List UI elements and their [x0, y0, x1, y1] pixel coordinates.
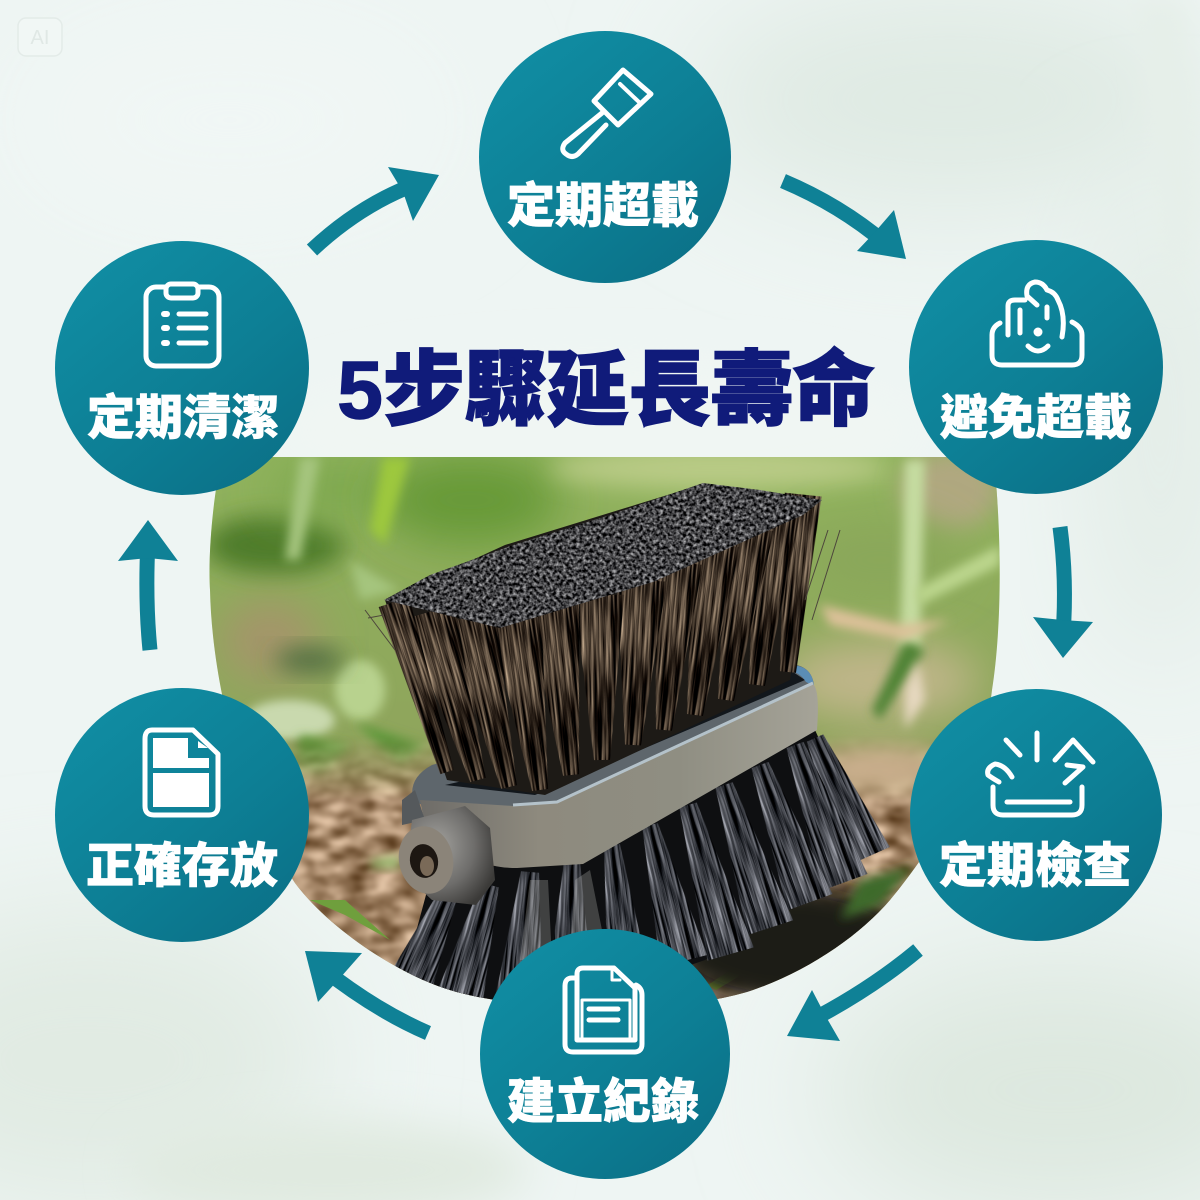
title: 5步驟延長壽命 [337, 345, 875, 436]
arrow: left column upwards [118, 520, 178, 650]
arrow: clean to check step [312, 167, 439, 250]
label: 定期檢查 [939, 839, 1131, 893]
step: 正確存放 [55, 688, 309, 942]
circle [910, 689, 1162, 941]
shadow under brush [692, 878, 894, 999]
circle [55, 688, 309, 942]
arrow: bottom to lower left [305, 951, 428, 1033]
brush top surface [384, 483, 822, 628]
icon: document storage [145, 730, 218, 815]
watermark: AI badge [18, 18, 62, 56]
icon: brush [563, 70, 651, 156]
circle [480, 929, 730, 1179]
label: 正確存放 [86, 840, 278, 893]
step: 避免超載 [909, 240, 1163, 494]
circle [479, 31, 731, 283]
brush metal holder front [393, 683, 818, 905]
icon: inspection tray [988, 733, 1093, 815]
step: 定期清潔 [55, 241, 309, 495]
icon: clipboard [146, 284, 219, 366]
circle [909, 240, 1163, 494]
label: 避免超載 [940, 392, 1132, 445]
label: 定期超載 [507, 180, 699, 233]
icon: overloaded tray [992, 282, 1082, 365]
arrow: right column downwards [1033, 527, 1093, 658]
circle [55, 241, 309, 495]
step: 定期超載 [479, 31, 731, 283]
label: 定期清潔 [87, 392, 279, 445]
step: 建立紀錄 [480, 929, 730, 1179]
step: 定期檢查 [910, 689, 1162, 941]
icon: record document [565, 968, 642, 1052]
brush lower bristles [385, 728, 890, 1010]
nut [393, 806, 495, 905]
brush upper bristles [365, 483, 840, 795]
arrow: lower right to bottom [787, 950, 918, 1041]
photo background: blurred grass and ground [200, 446, 1010, 1020]
arrow: top to right [783, 181, 906, 259]
label: 建立紀錄 [507, 1075, 699, 1129]
brush holder back plate and gasket [412, 664, 814, 815]
central photo: brush on grass [200, 446, 1010, 1020]
watermark: AI badge: AI [31, 27, 49, 49]
